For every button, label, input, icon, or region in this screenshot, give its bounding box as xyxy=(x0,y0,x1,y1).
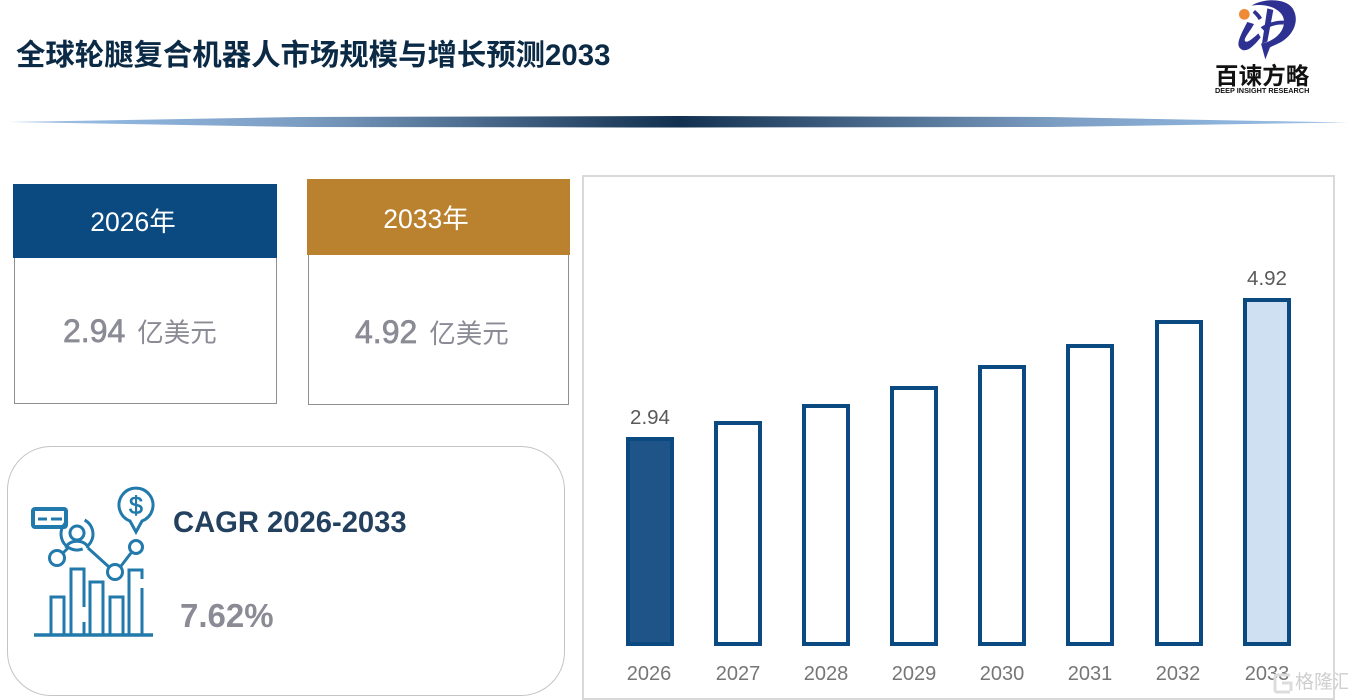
panel: CAGR xyxy=(7,446,565,696)
watermark xyxy=(1274,672,1348,694)
logo subtitle: DEEP INSIGHT RESEARCH xyxy=(1215,86,1309,95)
2033 header: 2033年 xyxy=(383,204,469,234)
bar chart: 2028 xyxy=(804,663,848,685)
logo xyxy=(1215,0,1309,95)
bar chart: 2032 xyxy=(1156,663,1200,685)
bar chart: 2.94 xyxy=(630,406,670,429)
logo text: 百谏方略 xyxy=(1215,63,1309,89)
bar chart: 2033 xyxy=(1245,663,1289,685)
icon: chart with dollar: $ xyxy=(129,492,143,520)
2033 value box xyxy=(308,249,569,405)
bar chart: 4.92 xyxy=(1247,267,1287,290)
panel: 2026 xyxy=(13,184,277,404)
panel: 2033 xyxy=(307,179,570,405)
2026 header xyxy=(13,184,277,258)
bar chart: 2030 xyxy=(980,663,1024,685)
panel: bar chart xyxy=(582,175,1335,700)
bar chart xyxy=(626,267,1291,685)
bar chart: 2027 xyxy=(716,663,760,685)
2026 value: 2.94 亿美元 xyxy=(63,313,217,349)
title: 全球轮腿复合机器人市场规模与增长预测2033 xyxy=(16,39,610,72)
CAGR value: 7.62% xyxy=(180,597,274,634)
CAGR heading: CAGR 2026-2033 xyxy=(173,507,407,539)
2026 header: 2026年 xyxy=(90,207,176,237)
bar chart: 2026 xyxy=(627,663,671,685)
bar chart: 2031 xyxy=(1068,663,1112,685)
2033 header xyxy=(307,179,570,255)
gradient divider xyxy=(11,116,1346,128)
bar chart: 2029 xyxy=(892,663,936,685)
2026 value box xyxy=(14,254,277,404)
2033 value: 4.92 亿美元 xyxy=(355,314,509,350)
icon: chart with dollar xyxy=(31,486,155,637)
